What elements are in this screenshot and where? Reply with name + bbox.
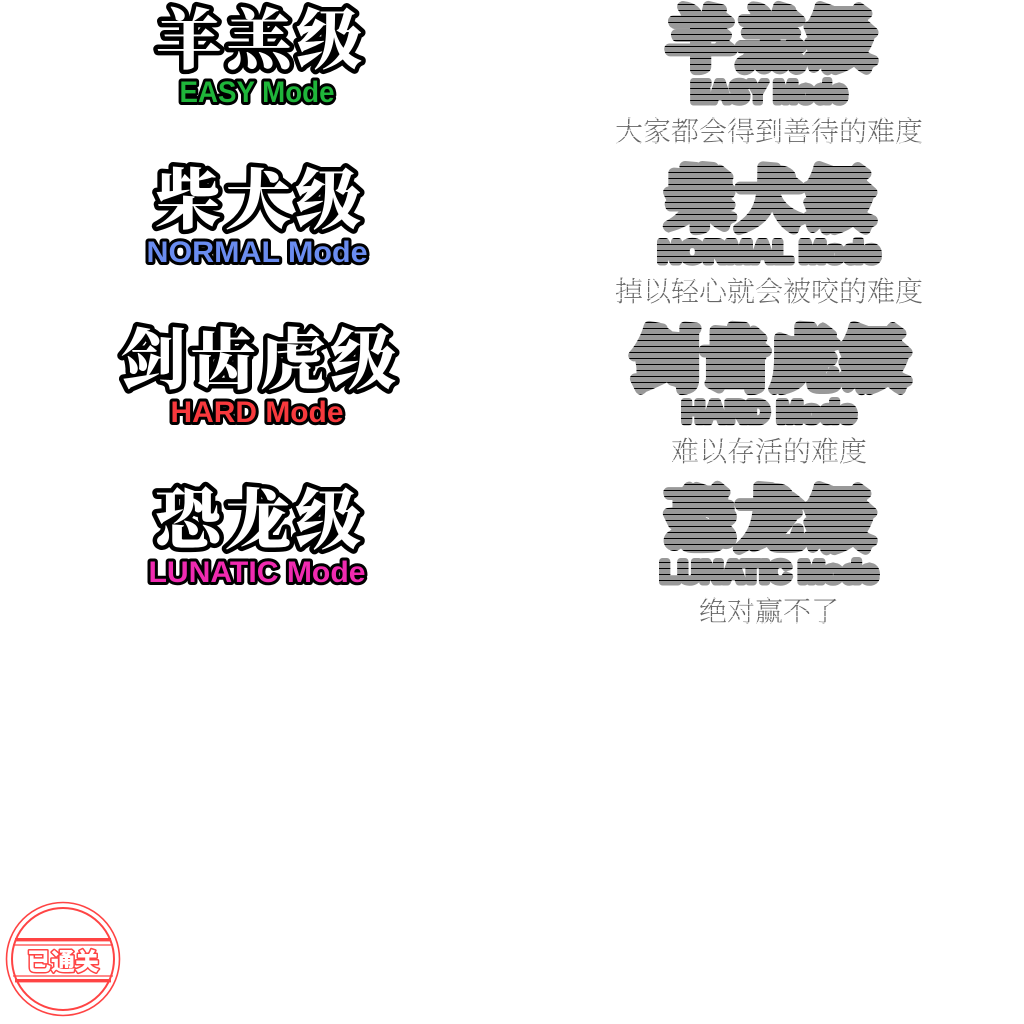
striped subheading: EASY Mode: EASY Mode xyxy=(692,76,846,109)
heading: hard: 剑齿虎级 xyxy=(120,325,400,398)
striped heading: easy: 羊羔级 xyxy=(668,5,878,78)
description: normal: 掉以轻心就会被咬的难度 xyxy=(615,276,923,308)
left column: normal mode xyxy=(146,165,368,269)
description: easy: 大家都会得到善待的难度 xyxy=(615,116,923,148)
right column: lunatic mode xyxy=(660,485,878,628)
heading: normal: 柴犬级 xyxy=(155,165,365,238)
right column: normal mode xyxy=(615,165,923,308)
subheading: LUNATIC Mode: LUNATIC Mode xyxy=(148,556,366,589)
striped subheading: NORMAL Mode: NORMAL Mode xyxy=(658,236,880,269)
striped heading: hard: 剑齿虎级 xyxy=(632,325,912,398)
description: lunatic: 绝对赢不了 xyxy=(699,596,839,628)
striped heading: normal: 柴犬级 xyxy=(667,165,877,238)
left column: lunatic mode xyxy=(148,485,366,589)
striped subheading: LUNATIC Mode: LUNATIC Mode xyxy=(660,556,878,589)
stamp: cleared xyxy=(6,902,120,1016)
heading: lunatic: 恐龙级 xyxy=(155,485,365,558)
description: hard: 难以存活的难度 xyxy=(671,436,867,468)
subheading: EASY Mode: EASY Mode xyxy=(180,76,334,109)
left column: hard mode xyxy=(120,325,400,429)
striped subheading: HARD Mode: HARD Mode xyxy=(682,396,856,429)
subheading: HARD Mode: HARD Mode xyxy=(170,396,344,429)
right column: easy mode xyxy=(615,5,923,148)
right column: hard mode xyxy=(632,325,912,468)
striped heading: lunatic: 恐龙级 xyxy=(667,485,877,558)
stamp text: 已通关 xyxy=(27,942,99,977)
left column: easy mode xyxy=(156,5,366,109)
heading: easy: 羊羔级 xyxy=(156,5,366,78)
subheading: NORMAL Mode: NORMAL Mode xyxy=(146,236,368,269)
